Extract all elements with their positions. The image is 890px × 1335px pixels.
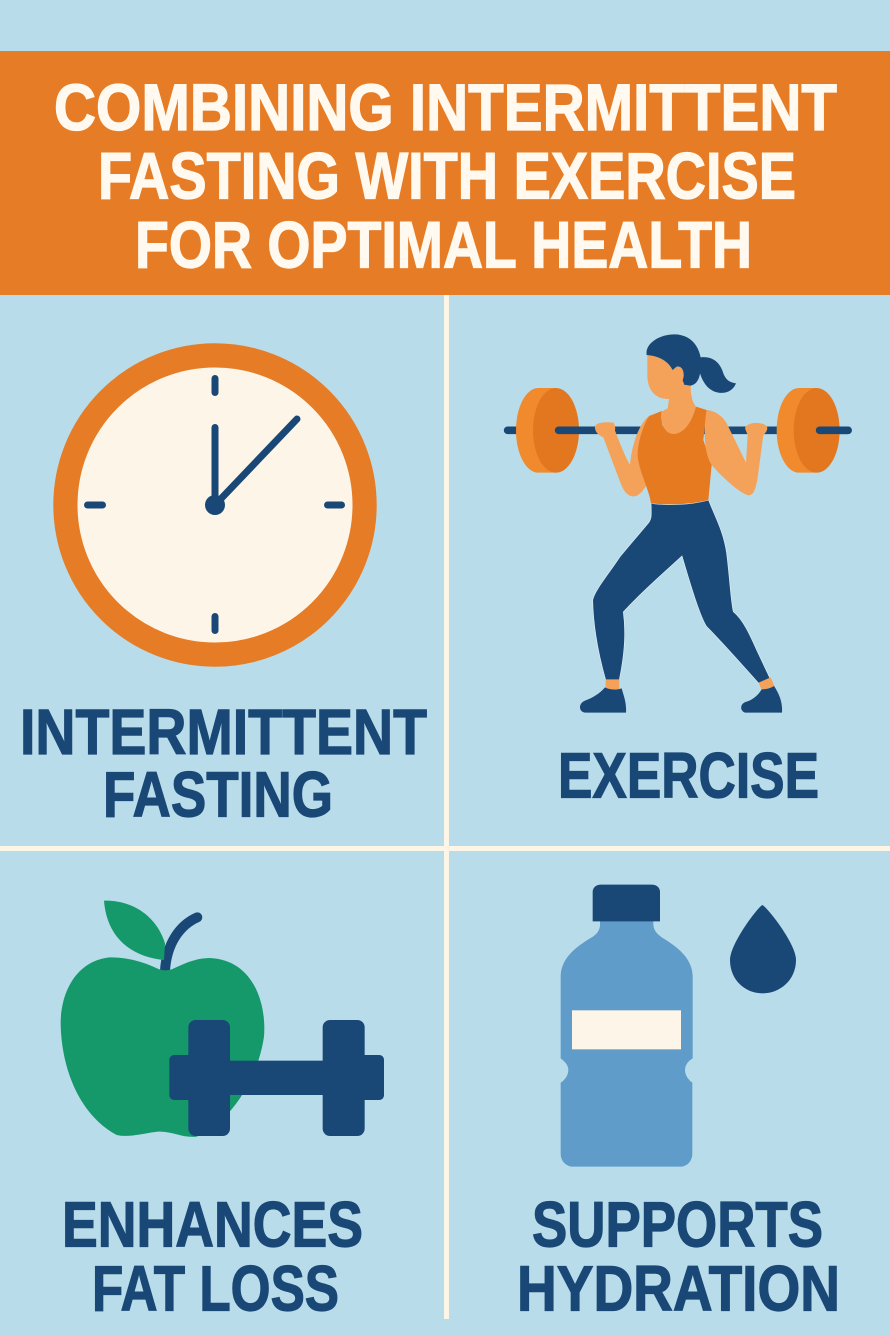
label: enhances fat loss bbox=[62, 1188, 363, 1324]
shoes bbox=[580, 686, 782, 713]
title bbox=[54, 70, 837, 282]
panel: intermittent fasting bbox=[0, 295, 444, 846]
bottle body bbox=[561, 920, 693, 1167]
ankles bbox=[606, 677, 775, 690]
label: supports hydration: HYDRATION bbox=[517, 1252, 840, 1324]
torso bbox=[638, 407, 712, 504]
water drop bbox=[730, 905, 796, 993]
icon: water bottle and drop bbox=[561, 885, 796, 1167]
label: intermittent fasting bbox=[20, 696, 427, 830]
bottle label bbox=[572, 1010, 681, 1049]
header banner bbox=[0, 51, 890, 295]
head and neck bbox=[647, 355, 696, 440]
dumbbell bbox=[169, 1020, 384, 1136]
apple stem bbox=[165, 917, 197, 971]
panel: exercise bbox=[449, 295, 890, 846]
hair bbox=[646, 334, 736, 393]
apple leaf bbox=[104, 901, 165, 960]
label: supports hydration bbox=[517, 1188, 840, 1324]
icon: apple and dumbbell bbox=[61, 901, 384, 1137]
bottle cap bbox=[593, 885, 660, 921]
right arm bbox=[705, 410, 767, 495]
label: enhances fat loss: ENHANCES bbox=[62, 1188, 363, 1260]
panel: supports hydration bbox=[449, 851, 890, 1324]
icon: woman lifting barbell bbox=[508, 334, 848, 713]
label: exercise: EXERCISE bbox=[558, 740, 819, 812]
label: intermittent fasting: FASTING bbox=[103, 758, 333, 830]
panel: enhances fat loss bbox=[0, 851, 444, 1324]
title: FOR OPTIMAL HEALTH bbox=[135, 208, 752, 282]
label: intermittent fasting: INTERMITTENT bbox=[20, 696, 427, 768]
legs bbox=[593, 500, 770, 683]
icon: clock bbox=[65, 355, 365, 655]
label: supports hydration: SUPPORTS bbox=[532, 1188, 823, 1260]
label: enhances fat loss: FAT LOSS bbox=[92, 1252, 339, 1324]
barbell bbox=[508, 388, 848, 473]
left arm bbox=[595, 415, 663, 496]
apple bbox=[61, 957, 264, 1137]
